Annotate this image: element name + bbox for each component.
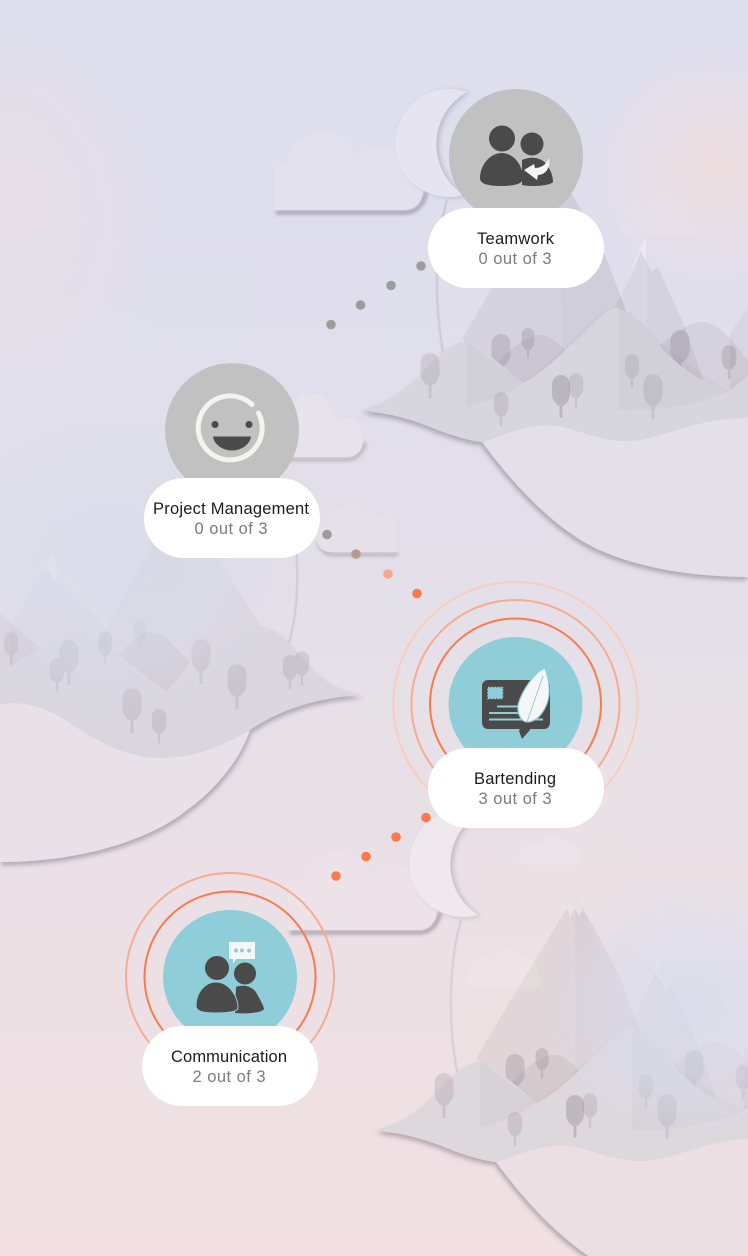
progress rings [126, 873, 334, 1081]
label pill: Teamwork [477, 230, 555, 248]
badge circle [163, 910, 297, 1044]
label pill: 3 out of 3 [478, 790, 552, 808]
background glow: left lavender haze [0, 405, 305, 725]
label pill: 0 out of 3 [194, 520, 268, 538]
node: Teamwork [428, 89, 604, 288]
background glow: top right pink haze [590, 45, 748, 285]
island: bottom right [377, 702, 748, 1256]
icon: card and feather [482, 668, 550, 739]
icon: smiling face [198, 396, 262, 460]
label pill: Bartending [474, 770, 556, 788]
label pill: Project Management [153, 500, 309, 518]
label pill [428, 748, 604, 828]
label pill: 2 out of 3 [192, 1068, 266, 1086]
node: Bartending [394, 582, 638, 828]
background glow: lower right lavender haze [540, 875, 748, 1145]
label pill [142, 1026, 318, 1106]
progress rings [394, 582, 638, 826]
moon: upper crescent [395, 89, 467, 197]
cloud: beside project management [270, 393, 365, 460]
cloud: small under project management [316, 505, 398, 554]
dotted path: grey to orange [322, 530, 422, 598]
dotted path: grey upper [326, 261, 426, 329]
cloud: upper [274, 132, 426, 212]
label pill: Communication [171, 1048, 287, 1066]
icon: two people with arrow [480, 126, 553, 186]
node: Communication [126, 873, 334, 1106]
label pill [428, 208, 604, 288]
background glow: left pink [0, 0, 170, 400]
faded clouds [466, 191, 748, 988]
badge circle [449, 89, 583, 223]
moon: lower crescent [409, 809, 481, 917]
badge circle [165, 363, 299, 497]
icon: two people with speech bubble [196, 942, 264, 1013]
badge circle [448, 637, 582, 771]
label pill [144, 478, 320, 558]
cloud: lower [288, 852, 440, 932]
island: top right [363, 0, 748, 577]
node: Project Management [144, 363, 320, 558]
dotted path: orange lower [331, 813, 431, 881]
label pill: 0 out of 3 [478, 250, 552, 268]
island: left [0, 289, 362, 871]
